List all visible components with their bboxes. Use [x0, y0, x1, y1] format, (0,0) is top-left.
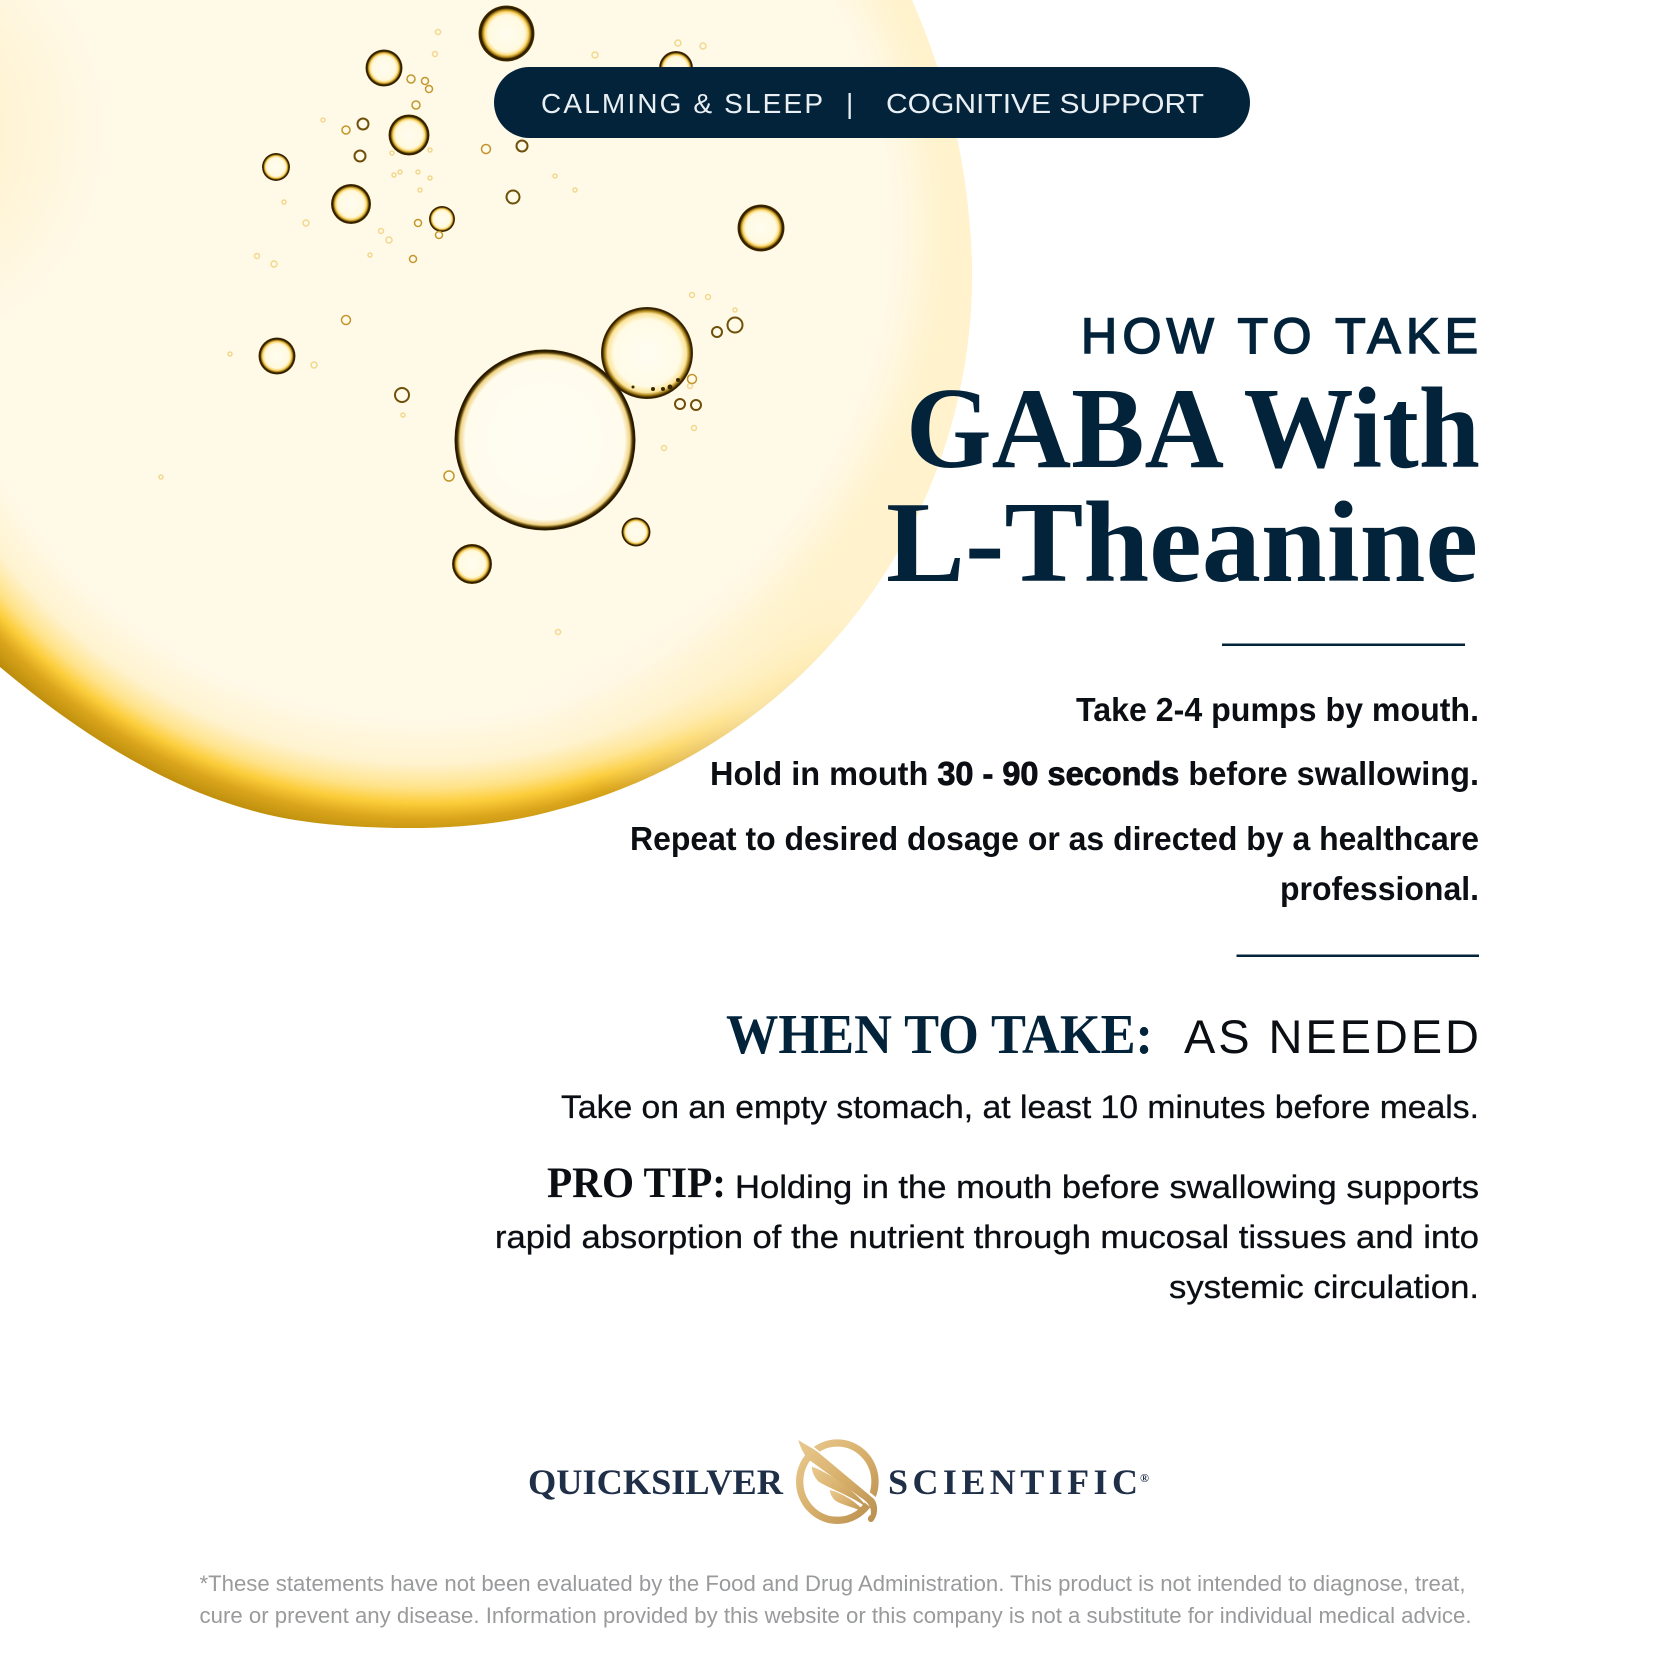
- pro tip: PRO TIP:: [547, 1160, 726, 1207]
- logo wordmark right: SCIENTIFIC: [888, 1462, 1138, 1502]
- pro tip: [495, 1160, 1479, 1305]
- directions text: professional.: [1280, 870, 1479, 907]
- pill label: CALMING & SLEEP: [541, 88, 823, 119]
- timing text: Take on an empty stomach, at least 10 minutes before meals.: [561, 1089, 1479, 1125]
- pill label: [541, 88, 1204, 119]
- title: [886, 365, 1480, 607]
- disclaimer: cure or prevent any disease. Information provided by this website or this company is not a substitute for individual medical advice.: [200, 1603, 1472, 1628]
- directions text: [630, 691, 1479, 907]
- directions text: Repeat to desired dosage or as directed by a healthcare: [630, 820, 1479, 857]
- pill: categories: [494, 67, 1250, 138]
- registered mark: ®: [1140, 1471, 1149, 1485]
- title: L-Theanine: [886, 479, 1478, 607]
- pro tip: Holding in the mouth before swallowing supports: [735, 1169, 1479, 1205]
- pill label: COGNITIVE SUPPORT: [886, 88, 1204, 119]
- when to take heading: WHEN TO TAKE:: [726, 1004, 1153, 1066]
- directions text: Take 2-4 pumps by mouth.: [1076, 691, 1479, 728]
- pro tip: systemic circulation.: [1169, 1269, 1479, 1305]
- logo: [528, 1440, 1149, 1522]
- oil drop background: [0, 0, 980, 840]
- directions text: Hold in mouth 30 - 90 seconds before swallowing.: [710, 755, 1479, 792]
- disclaimer: [200, 1571, 1472, 1628]
- when to take heading: AS NEEDED: [1184, 1010, 1479, 1063]
- divider: [1222, 644, 1465, 646]
- disclaimer: *These statements have not been evaluated by the Food and Drug Administration. This product is not intended to diagnose, treat,: [200, 1571, 1466, 1596]
- bubbles: [159, 6, 784, 634]
- when to take heading: [726, 1004, 1479, 1066]
- divider: [1236, 954, 1479, 957]
- heading: how to take: HOW TO TAKE: [1081, 308, 1478, 364]
- logo wordmark left: QUICKSILVER: [528, 1462, 784, 1502]
- pro tip: rapid absorption of the nutrient through mucosal tissues and into: [495, 1219, 1479, 1255]
- title: GABA With: [906, 365, 1480, 493]
- icon: quicksilver emblem: [798, 1440, 877, 1522]
- pill label: |: [846, 88, 853, 119]
